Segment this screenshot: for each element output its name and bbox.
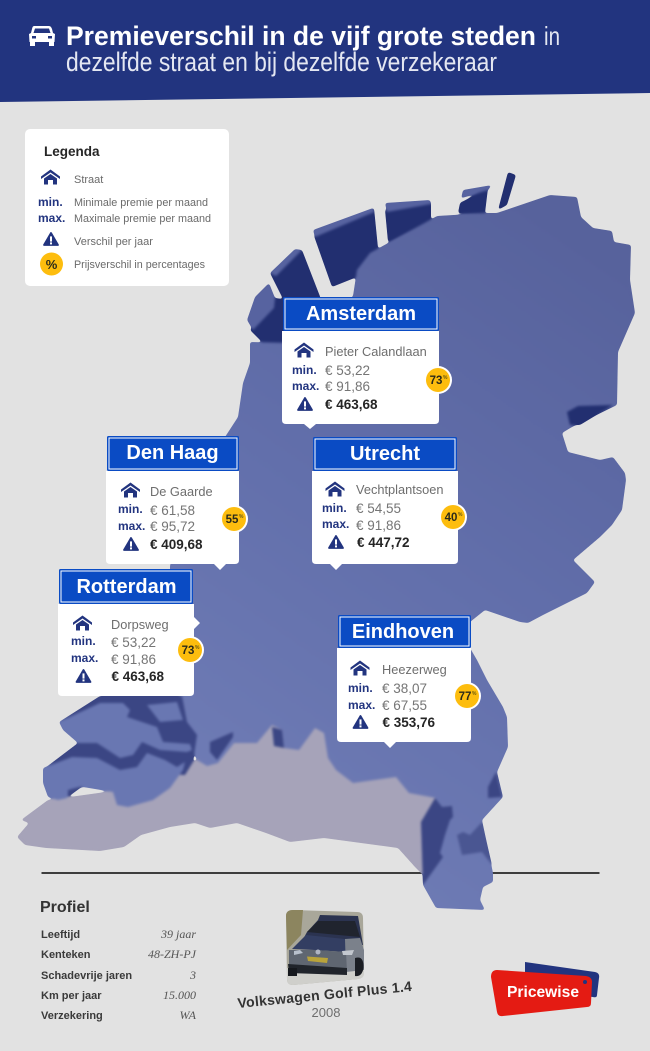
main land mass: [170, 195, 635, 910]
row: insurance: WA: [180, 1008, 197, 1022]
map shadow: [17, 700, 436, 875]
percent badge: [220, 505, 248, 533]
Zeeland dark base: [45, 696, 197, 775]
sign: Rotterdam: [76, 576, 177, 598]
Zeeland bay: [68, 786, 83, 797]
street: [121, 482, 213, 499]
legend: difference per year: Verschil per jaar: [74, 236, 153, 248]
city card: Utrecht: [312, 437, 467, 570]
percent badge: [424, 366, 452, 394]
city card: Den Haag: [106, 436, 248, 570]
yearly difference: [76, 669, 165, 684]
premiums: max.: [118, 519, 145, 533]
row: licence plate: Kenteken: [41, 949, 91, 961]
Dollard bay: [567, 405, 613, 425]
car photo: [286, 910, 364, 985]
premiums: € 91,86: [356, 518, 401, 533]
premiums: max.: [348, 698, 375, 712]
percent badge: %: [472, 691, 477, 697]
map of the Netherlands: [17, 172, 635, 910]
Limburg east: [488, 772, 502, 798]
sign: [313, 437, 457, 471]
street: Dorpsweg: [111, 617, 169, 632]
percent badge: %: [239, 514, 244, 520]
Zeeland upper islands: [59, 703, 192, 758]
subtitle: dezelfde straat en bij dezelfde verzekeraar: [66, 47, 497, 77]
premiums: min.: [348, 681, 373, 695]
legend: percentage: %: [46, 257, 58, 272]
percent badge: 40: [445, 512, 457, 524]
street: De Gaarde: [150, 484, 213, 499]
yearly difference: [298, 397, 378, 412]
legend: difference per year: [44, 233, 153, 248]
premiums: € 95,72: [150, 519, 195, 534]
Maas notch: [272, 727, 284, 748]
profile heading: Profiel: [40, 899, 90, 916]
premiums: min.: [292, 363, 317, 377]
row: licence plate: [41, 947, 197, 961]
legend: maximum: Maximale premie per maand: [74, 213, 211, 225]
row: licence plate: 48-ZH-PJ: [148, 947, 197, 961]
premiums: € 61,58: [150, 503, 195, 518]
row: age: Leeftijd: [41, 929, 80, 941]
Pricewise logo: [491, 962, 599, 1016]
street: [73, 616, 169, 632]
premiums: [71, 634, 156, 667]
sign: [107, 436, 239, 471]
sign: [338, 615, 471, 648]
yearly difference: [354, 715, 436, 730]
title end: in: [544, 21, 560, 51]
yearly difference: € 463,68: [112, 669, 165, 684]
premiums: max.: [292, 379, 319, 393]
premiums: [348, 681, 427, 713]
legend: minimum: Minimale premie per maand: [74, 197, 208, 209]
legend heading: Legenda: [44, 144, 100, 159]
sign: [283, 297, 439, 331]
icon: car: [29, 26, 55, 46]
row: claim-free years: Schadevrije jaren: [41, 970, 132, 982]
premiums: [118, 502, 195, 534]
percent badge: 73: [182, 645, 194, 657]
legend: percentage: Prijsverschil in percentages: [74, 259, 205, 271]
row: insurance: [41, 1008, 197, 1022]
street: Vechtplantsoen: [356, 482, 444, 497]
city card: Rotterdam: [58, 569, 204, 696]
row: claim-free years: 3: [189, 968, 196, 982]
street: Heezerweg: [382, 662, 447, 677]
row: km per year: 15.000: [163, 988, 196, 1002]
premiums: € 91,86: [111, 652, 156, 667]
car year: 2008: [312, 1005, 340, 1020]
row: age: [41, 927, 196, 941]
premiums: € 67,55: [382, 698, 427, 713]
legend: maximum: max.: [38, 211, 65, 225]
row: km per year: [41, 988, 196, 1002]
legend: street: Straat: [74, 174, 103, 186]
premiums: min.: [322, 501, 347, 515]
yearly difference: € 353,76: [382, 715, 436, 730]
row: km per year: Km per jaar: [41, 990, 102, 1002]
percent badge: 77: [459, 691, 471, 703]
percent badge: [453, 682, 481, 710]
wadden islands: [247, 172, 516, 355]
row: insurance: Verzekering: [41, 1010, 103, 1022]
yearly difference: € 409,68: [150, 537, 203, 552]
car name: Volkswagen Golf Plus 1.4: [237, 978, 413, 1011]
Pricewise logo: Pricewise: [507, 984, 579, 1001]
premiums: € 91,86: [325, 379, 370, 394]
header banner: [0, 0, 650, 102]
title: Premieverschil in de vijf grote steden: [66, 21, 536, 51]
yearly difference: [124, 537, 203, 552]
sign: Den Haag: [126, 442, 219, 464]
premiums: min.: [71, 634, 96, 648]
Zeeland lower islands: [43, 753, 185, 807]
legend: percentage: [40, 252, 205, 276]
Limburg mid: [457, 822, 492, 865]
percent badge: 73: [430, 375, 442, 387]
premiums: max.: [71, 651, 98, 665]
sign: Eindhoven: [352, 621, 454, 643]
percent badge: %: [443, 375, 448, 381]
sign: Utrecht: [350, 443, 420, 465]
percent badge: [176, 636, 204, 664]
sign: Amsterdam: [306, 303, 416, 325]
legend: maximum: [38, 211, 211, 225]
percent badge: 55: [226, 514, 239, 526]
city card: Eindhoven: [337, 615, 481, 748]
Haringvliet bay: [210, 732, 233, 760]
legend panel: [25, 129, 229, 286]
Limburg west: [421, 798, 453, 885]
profile panel: [40, 899, 197, 1022]
premiums: max.: [322, 517, 349, 531]
city card: Amsterdam: [282, 297, 452, 429]
legend: minimum: min.: [38, 195, 63, 209]
divider line: [42, 872, 600, 874]
yearly difference: € 447,72: [357, 535, 410, 550]
sign: [59, 569, 193, 604]
yearly difference: € 463,68: [325, 397, 378, 412]
row: claim-free years: [41, 968, 196, 982]
premiums: € 53,22: [111, 635, 156, 650]
street: [294, 342, 427, 359]
premiums: min.: [118, 502, 143, 516]
percent badge: %: [195, 645, 200, 651]
legend: street: [41, 170, 103, 186]
premiums: [292, 363, 370, 394]
legend: minimum: [38, 195, 208, 209]
premiums: € 38,07: [382, 681, 427, 696]
percent badge: %: [458, 512, 463, 518]
percent badge: [439, 503, 467, 531]
premiums: € 54,55: [356, 501, 401, 516]
row: age: 39 jaar: [160, 927, 196, 941]
premiums: [322, 501, 401, 533]
premiums: € 53,22: [325, 363, 370, 378]
yearly difference: [329, 535, 410, 550]
street: [350, 660, 447, 677]
street: Pieter Calandlaan: [325, 344, 427, 359]
